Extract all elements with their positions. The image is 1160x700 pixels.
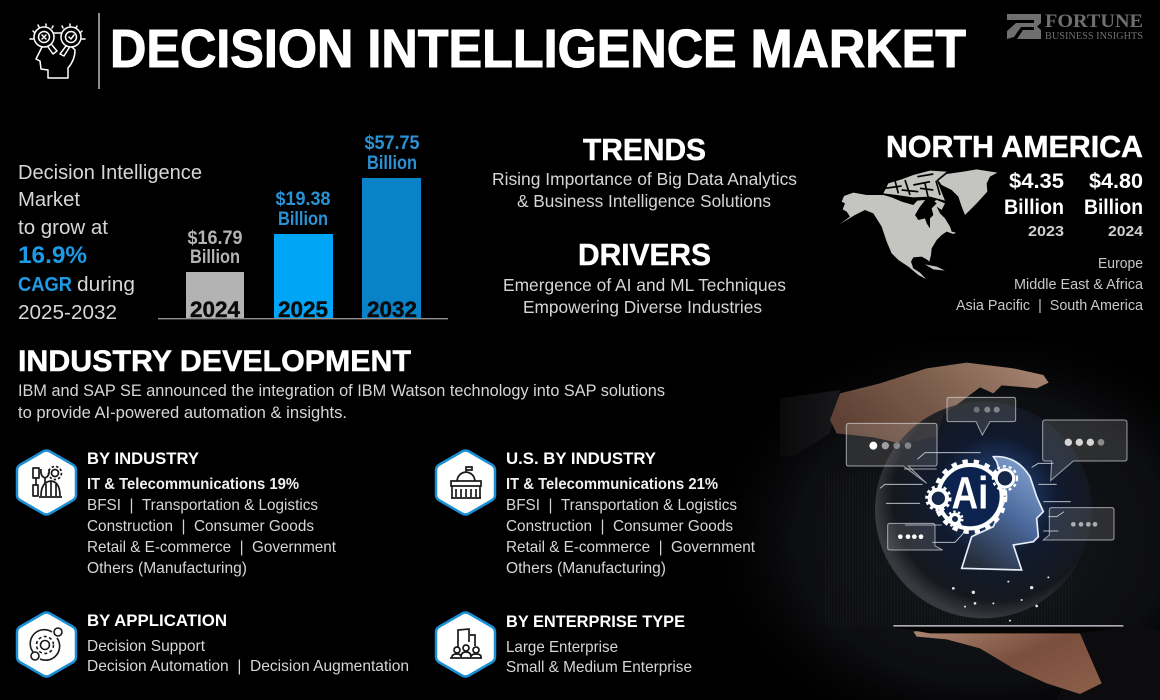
stat: 2023 value: Billion	[1004, 196, 1064, 219]
text block: other regions: Europe	[1098, 255, 1143, 272]
text block: by industry: IT & Telecommunications 19%	[87, 476, 299, 493]
text block: by industry	[87, 449, 337, 577]
section: drivers: Empowering Diverse Industries	[523, 297, 762, 317]
text block: by application	[87, 611, 409, 675]
suit pinstripes	[823, 473, 1073, 627]
globe	[875, 402, 1092, 618]
icon: government building hexagon	[436, 450, 495, 514]
section: drivers	[503, 237, 786, 317]
image: AI head hologram between hands	[693, 340, 1160, 700]
text block: CAGR summary: during	[77, 273, 135, 296]
icon: tools and hard hat hexagon	[17, 450, 76, 514]
bar 2025	[274, 189, 333, 322]
stat: 2023 value: $4.35	[1009, 170, 1064, 193]
text block: by industry: BY INDUSTRY	[87, 449, 200, 468]
stat: 2023 value	[1004, 170, 1064, 240]
speech bubbles	[846, 397, 1127, 550]
bubble dots	[869, 407, 1104, 539]
text block: by industry: Construction | Consumer Goods	[87, 518, 314, 535]
text block: CAGR summary: Decision Intelligence	[18, 161, 202, 184]
divider	[98, 13, 100, 89]
text block: by industry: Retail & E-commerce | Government	[87, 539, 337, 556]
text block: other regions: Asia Pacific | South America	[956, 297, 1144, 314]
text block: other regions: Middle East & Africa	[1014, 276, 1144, 293]
bar 2032	[362, 133, 421, 322]
text block: U.S. by industry: Retail & E-commerce | Government	[506, 539, 756, 556]
icon: gear cycle hexagon	[17, 612, 76, 676]
lower sleeve	[1057, 623, 1160, 700]
stat: 2023 value: 2023	[1028, 223, 1064, 240]
island channels	[885, 174, 940, 198]
text block: CAGR summary: to grow at	[18, 216, 108, 239]
text block: U.S. by industry: BFSI | Transportation & Logistics	[506, 497, 737, 514]
section: industry development: to provide AI-powered automation & insights.	[18, 404, 347, 422]
section: industry development	[18, 345, 665, 422]
bar 2032: Billion	[367, 153, 417, 174]
icon: enterprise hexagon	[436, 612, 495, 676]
bar 2025: Billion	[278, 209, 328, 230]
text block: by enterprise type: Large Enterprise	[506, 639, 618, 656]
bar 2024: Billion	[190, 247, 240, 268]
text block: CAGR summary: CAGR	[18, 274, 73, 296]
tablet	[893, 627, 1123, 633]
Hudson Bay	[915, 196, 937, 228]
mainland	[839, 193, 956, 279]
text block: by application: Decision Automation | Decision Augmentation	[87, 658, 409, 675]
text block: CAGR summary: 2025-2032	[18, 301, 117, 324]
text block: other regions	[956, 255, 1144, 314]
title: DECISION INTELLIGENCE MARKET	[110, 19, 966, 79]
text block: by industry: Others (Manufacturing)	[87, 560, 247, 577]
circuit lines	[880, 453, 1071, 542]
section: trends: Rising Importance of Big Data Analytics	[492, 169, 797, 189]
bar 2025: 2025	[278, 297, 328, 322]
bar 2024: $16.79	[188, 228, 242, 249]
text block: U.S. by industry: Others (Manufacturing)	[506, 560, 666, 577]
suit	[693, 340, 1160, 700]
heading: North America: NORTH AMERICA	[886, 129, 1143, 164]
text block: by industry: BFSI | Transportation & Logistics	[87, 497, 318, 514]
logo: Fortune Business Insights	[1007, 11, 1143, 42]
Ai label: Ai	[952, 467, 988, 518]
stat: 2024 value	[1084, 170, 1144, 240]
Arctic islands	[883, 171, 947, 201]
tablet edge	[893, 625, 1123, 627]
map: North America	[839, 169, 997, 279]
text block: by enterprise type	[506, 612, 692, 676]
bar 2032: 2032	[367, 297, 417, 322]
section: drivers: Emergence of AI and ML Techniques	[503, 275, 786, 295]
text block: U.S. by industry: IT & Telecommunications 21%	[506, 476, 718, 493]
text block: by enterprise type: Small & Medium Enterprise	[506, 659, 692, 676]
stat: 2024 value: $4.80	[1089, 170, 1143, 193]
axis	[158, 318, 448, 319]
section: trends	[492, 132, 797, 211]
text block: CAGR summary	[18, 161, 202, 324]
Greenland	[938, 169, 997, 215]
text block: by application: Decision Support	[87, 638, 206, 655]
text block: by enterprise type: BY ENTERPRISE TYPE	[506, 612, 685, 631]
section: industry development: INDUSTRY DEVELOPMENT	[18, 345, 411, 378]
logo: Fortune Business Insights: FORTUNE	[1045, 11, 1143, 32]
bar 2032: $57.75	[364, 133, 420, 154]
data sparkles	[952, 576, 1049, 622]
text block: CAGR summary: 16.9%	[18, 242, 87, 269]
bar 2024: 2024	[190, 297, 241, 322]
text block: by application: BY APPLICATION	[87, 611, 227, 630]
stat: 2024 value: 2024	[1108, 223, 1144, 240]
sleeve	[780, 390, 840, 457]
bar 2024	[186, 228, 244, 322]
text block: U.S. by industry	[506, 449, 756, 577]
bar 2025: $19.38	[276, 189, 330, 210]
section: trends: TRENDS	[583, 132, 706, 167]
head silhouette	[962, 457, 1043, 570]
icon: head with two light bulbs	[30, 24, 85, 78]
bar chart: market size	[158, 133, 448, 322]
section: drivers: DRIVERS	[578, 237, 711, 272]
stat: 2024 value: Billion	[1084, 196, 1143, 219]
text block: CAGR summary: Market	[18, 188, 80, 211]
section: trends: & Business Intelligence Solutions	[517, 191, 771, 211]
gear ring	[927, 461, 1017, 532]
Cuba	[925, 264, 945, 271]
text block: U.S. by industry: U.S. BY INDUSTRY	[506, 449, 657, 468]
section: industry development: IBM and SAP SE announced the integration of IBM Watson technology into SAP solutions	[18, 382, 665, 400]
upper hand	[830, 363, 1049, 444]
lower hand	[913, 629, 1102, 694]
text block: U.S. by industry: Construction | Consumer Goods	[506, 518, 733, 535]
logo: Fortune Business Insights: BUSINESS INSIGHTS	[1045, 31, 1143, 42]
